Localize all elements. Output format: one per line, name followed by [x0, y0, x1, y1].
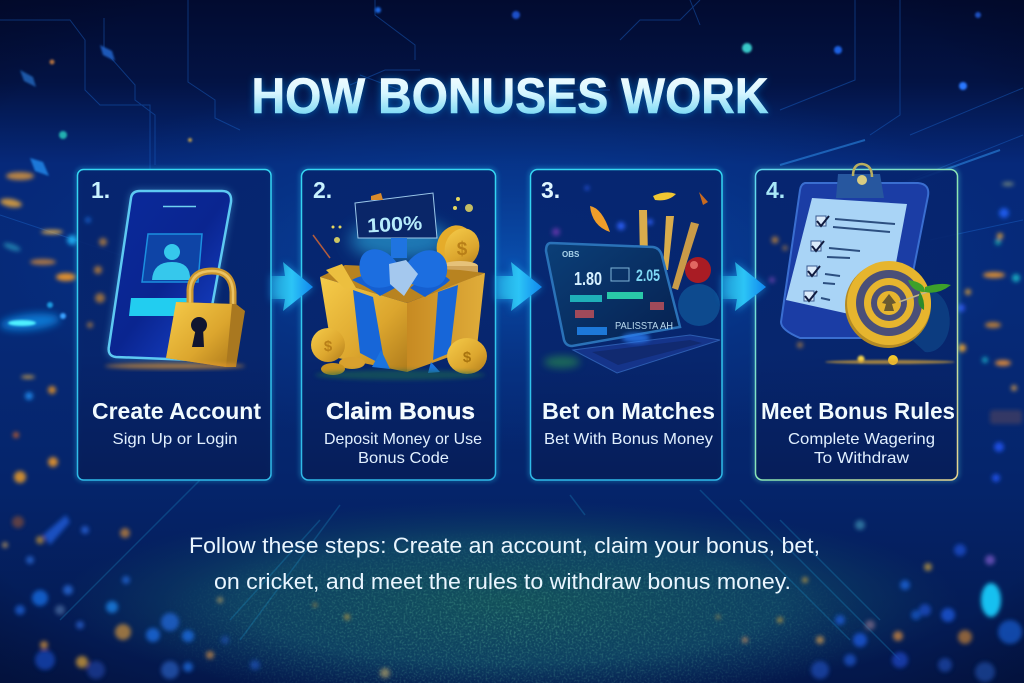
icon: cricket stumps and ball [639, 210, 720, 326]
background light streaks and bokeh, left [0, 172, 77, 483]
step heading: Meet Bonus Rules [761, 398, 955, 424]
icon: laptop with odds: OBS [562, 250, 580, 259]
icon: phone with profile [108, 190, 232, 361]
icon: laptop with odds: 2.05 [636, 266, 660, 285]
step description: Complete Wagering [788, 431, 935, 448]
step description: Sign Up or Login [112, 431, 238, 448]
arrow: step 1 to 2 [271, 262, 313, 312]
sparkle dots [313, 197, 473, 258]
step number 2: 2. [313, 177, 332, 203]
panel: step 1 create account [77, 169, 271, 480]
step heading: Claim Bonus [326, 398, 475, 424]
icon: laptop with odds [546, 243, 720, 373]
background light streaks and bokeh, right [957, 182, 1022, 482]
icon: 100 percent sign: 100% [367, 213, 423, 237]
step description second line: Bonus Code [358, 450, 449, 467]
step number 4: 4. [766, 177, 785, 203]
step heading: Bet on Matches [542, 398, 715, 424]
step heading: Create Account [92, 398, 261, 424]
icon: gift box with coins [311, 220, 487, 380]
icon: gold padlock [166, 271, 245, 367]
panel: step 4 meet bonus rules [755, 164, 958, 480]
arrow: step 3 to 4 [722, 262, 766, 312]
title: HOW BONUSES WORK [252, 68, 768, 124]
panel: step 2 claim bonus [301, 169, 496, 480]
panel: step 3 bet on matches [530, 169, 722, 480]
card background bokeh [85, 217, 107, 328]
step description second line: To Withdraw [814, 450, 909, 467]
icon: gold target with dart [825, 261, 955, 365]
bow [352, 276, 395, 296]
step description: Bet With Bonus Money [544, 431, 713, 448]
icon: gift box with coins: $ [324, 338, 333, 355]
card background bokeh [769, 236, 803, 348]
step number 1: 1. [91, 177, 110, 203]
icon: 100 percent sign [350, 193, 450, 260]
summary text: Follow these steps: Create an account, claim your bonus, bet, [189, 533, 820, 558]
arrow: step 2 to 3 [496, 262, 542, 312]
decorative flames [552, 186, 708, 236]
icon: laptop with odds: PALISSTA AH [615, 321, 673, 332]
title: HOW BONUSES WORK [252, 68, 768, 124]
summary text [189, 533, 820, 594]
icon: laptop with odds: 1.80 [574, 269, 602, 289]
icon: gift box with coins: $ [457, 239, 468, 260]
icon: gift box with coins: $ [463, 349, 472, 366]
step number 3: 3. [541, 177, 560, 203]
icon: clipboard checklist [781, 164, 928, 338]
summary text: on cricket, and meet the rules to withdraw bonus money. [214, 569, 791, 594]
step description: Deposit Money or Use [324, 431, 482, 448]
